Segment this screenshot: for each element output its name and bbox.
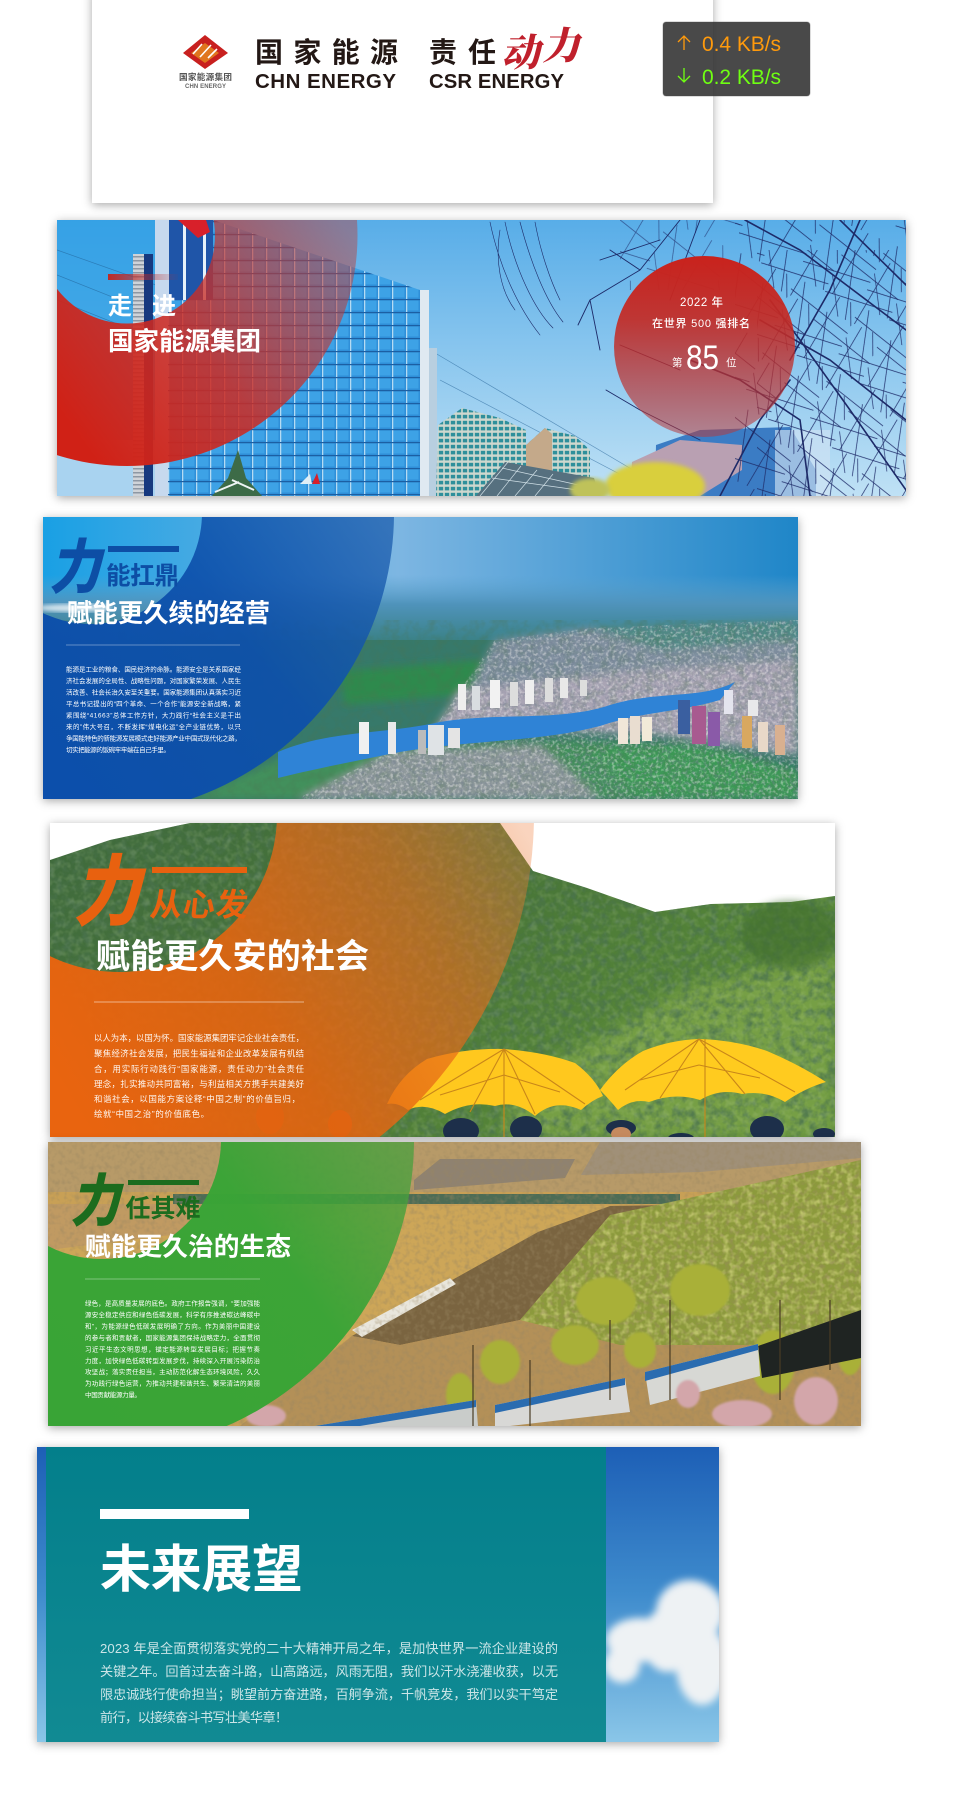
body text: 济社会发展的全局性、战略性问题，对国家繁荣发展、人民生 [66, 676, 242, 685]
heading: 责任动力 CSR ENERGY: CSR ENERGY [429, 71, 564, 93]
upload speed [678, 33, 781, 89]
body text: 活改善、社会长治久安至关重要。国家能源集团认真落实习近 [66, 688, 242, 696]
emblem caption: CHN ENERGY [185, 84, 226, 90]
body text: 2023 年是全面贯彻落实党的二十大精神开局之年，是加快世界一流企业建设的 [100, 1640, 558, 1656]
body text: 绿色，是高质量发展的底色。政府工作报告强调，“要加强能 [85, 1298, 260, 1308]
illustration: bare tree branches [490, 220, 928, 526]
heading: 责任动力 CSR ENERGY: 责任 [429, 37, 496, 68]
emblem caption: 国家能源集团 [179, 71, 232, 82]
body text: 聚焦经济社会发展，把民生福祉和企业改革发展有机结 [94, 1048, 304, 1058]
ring arc overlay [0, 399, 534, 1229]
body text: 来的”伟大号召，不断发挥“煤电化运”全产业链优势，以只 [66, 722, 242, 731]
body text: 中国贡献能源力量。 [85, 1390, 141, 1399]
body text: 的参与者和贡献者，国家能源集团保持战略定力，全面贯彻 [85, 1333, 260, 1342]
heading: 未来展望: 未来展望 [100, 1541, 303, 1598]
upload speed: 0.2 KB/s [702, 66, 781, 89]
body text [100, 1640, 558, 1725]
teal text block [46, 1447, 606, 1742]
body text: 力度，加快绿色低碳转型发展步伐，持续深入开展污染防治 [85, 1356, 260, 1365]
icon: CHN Energy diamond emblem [183, 35, 228, 69]
panel: 力任其难 ecology [48, 1142, 861, 1426]
emblem caption [179, 71, 232, 90]
ring arc overlay [0, 210, 394, 816]
accent bar [108, 274, 178, 280]
heading: 责任动力 CSR ENERGY [429, 15, 590, 93]
ranking circle [614, 256, 795, 437]
icon: 力 calligraphy: 力 [68, 830, 160, 942]
accent bar [108, 546, 179, 552]
panel: 力从心发 harmonious society [50, 823, 835, 1137]
heading: 赋能更久治的生态: 赋能更久治的生态 [85, 1232, 291, 1262]
body text: 为功践行绿色运营，为推动共建和谐共生、繁荣清洁的美丽 [85, 1378, 260, 1388]
panel: 走进国家能源集团 [57, 220, 906, 496]
body text: 能源是工业的粮食、国民经济的命脉。能源安全是关系国家经 [66, 664, 242, 674]
ring arc overlay [0, 828, 414, 1452]
icon: 力 calligraphy: 力 [45, 521, 115, 606]
body text: 绘就“中国之治”的价值底色。 [94, 1109, 209, 1119]
body text: 限忠诚践行使命担当；眺望前方奋进路，百舸争流，千帆竞发，我们以实干笃定 [100, 1686, 558, 1703]
body text: 习近平生态文明思想，锚定能源转型发展目标；把握节奏 [85, 1344, 260, 1354]
heading: 国家能源集团: 国家能源集团 [108, 328, 261, 356]
ranking circle: 在世界 500 强排名 [652, 316, 750, 330]
ranking circle: 第 [672, 356, 682, 369]
panel: 未来展望 outlook [37, 1447, 719, 1742]
heading: 赋能更久续的经营: 赋能更久续的经营 [67, 600, 270, 628]
body text: 前行，以接续奋斗书写壮美华章！ [100, 1709, 288, 1725]
logo lockup [179, 15, 590, 93]
body text: 源安全稳定供应和绿色低碳发展，科学有序推进碳达峰碳中 [85, 1310, 260, 1319]
photo: aerial view of river city [37, 517, 798, 799]
photo: green hillside and yellow umbrellas [50, 823, 838, 1144]
body text: 理念，扎实推动共同富裕，与利益相关方携手共建美好 [94, 1079, 305, 1089]
accent bar [100, 1509, 249, 1519]
photo: office building and sky [57, 220, 906, 510]
heading: 能扛鼎: 能扛鼎 [106, 562, 179, 590]
body text: 关键之年。回首过去奋斗路，山高路远，风雨无阻，我们以汗水浇灌收获，以无 [100, 1663, 558, 1679]
body text: 和谐社会，以国能方案诠释“中国之制”的价值旨归， [94, 1094, 300, 1104]
panel: 能扛鼎 sustainable operation [43, 517, 798, 799]
network speed widget [663, 22, 810, 96]
heading: 责任动力 CSR ENERGY: 动力 [500, 15, 590, 77]
body text: 攻坚战；落实责任担当，主动防范化解生态环境风险，久久 [85, 1367, 260, 1376]
heading: 从心发: 从心发 [148, 887, 250, 923]
accent bar [128, 1180, 199, 1185]
body text: 合，用实际行动践行“国家能源，责任动力”社会责任 [94, 1064, 305, 1074]
body text [94, 1033, 305, 1119]
panel: logo header card [92, 0, 713, 203]
body text: 争国能特色的新能源发展模式走好能源产业中国式现代化之路， [66, 734, 241, 742]
body text: 平总书记提出的“四个革命、一个合作”能源安全新战略，紧 [66, 699, 242, 708]
heading: 任其难: 任其难 [126, 1195, 200, 1223]
heading: 走进: 走进 [108, 293, 176, 320]
icon: 力 calligraphy: 力 [66, 1155, 134, 1238]
title decoration: ring arc [0, 5, 358, 466]
body text [66, 664, 242, 754]
body text: 紧围绕“41663”总体工作方针，大力践行“社会主义是干出 [66, 710, 241, 720]
accent bar [152, 867, 247, 873]
heading: 赋能更久安的社会: 赋能更久安的社会 [96, 938, 369, 976]
photo: blue sky with cloud [37, 1447, 728, 1742]
body text: 和”，为能源绿色低碳发展明确了方向。作为美丽中国建设 [85, 1322, 260, 1330]
ranking circle: 位 [726, 356, 737, 369]
heading: 国家能源 CHN ENERGY [255, 37, 398, 93]
ranking circle: 85 [686, 339, 719, 377]
heading: 国家能源 CHN ENERGY: CHN ENERGY [255, 70, 396, 93]
upload speed: 0.4 KB/s [702, 33, 781, 56]
ranking circle: 2022 年 [680, 295, 723, 309]
body text: 切实把能源的饭碗牢牢端在自己手里。 [66, 745, 170, 754]
heading: 国家能源 CHN ENERGY: 国家能源 [255, 37, 398, 68]
body text [85, 1298, 260, 1399]
body text: 以人为本，以国为怀。国家能源集团牢记企业社会责任， [94, 1033, 304, 1043]
photo: golden fields and electric train [48, 1142, 864, 1428]
